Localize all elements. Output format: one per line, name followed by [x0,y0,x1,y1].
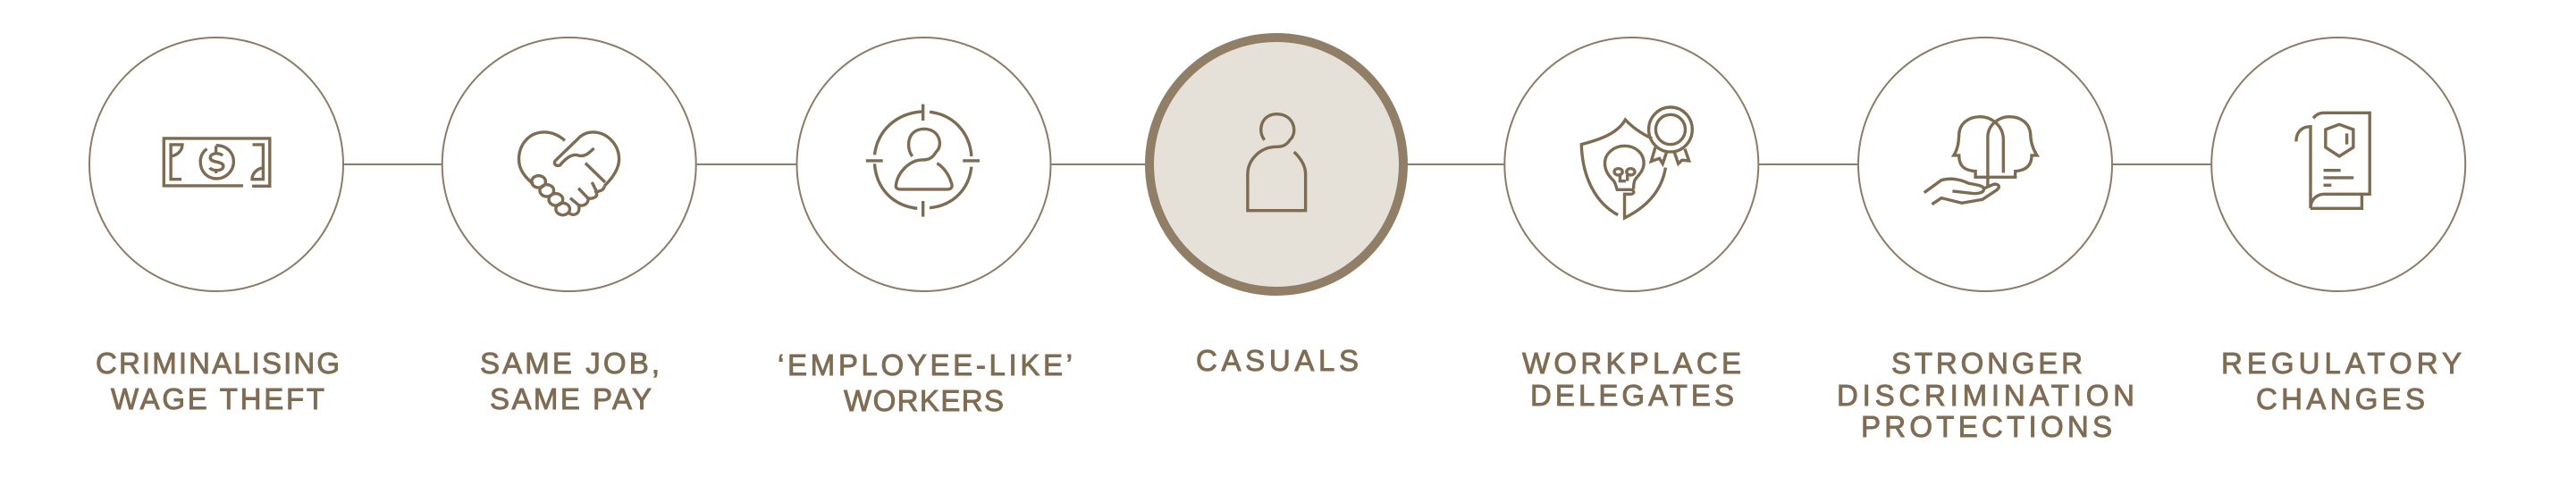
step: same job, same pay [442,38,696,415]
step: workplace delegates [1504,38,1758,412]
label: regulatory changes: REGULATORY [2221,347,2462,380]
icon: person in target [866,105,980,217]
circle: stronger discrimination protections [1858,38,2112,291]
label: workplace delegates: WORKPLACE [1522,347,1741,380]
circle: criminalising wage theft [89,38,343,291]
step: regulatory changes [2211,38,2465,415]
label: employee-like workers: WORKERS [844,384,1004,417]
label: same job, same pay: SAME JOB, [480,347,660,380]
step: stronger discrimination protections [1837,38,2134,443]
label: regulatory changes [2221,347,2462,415]
step: employee-like workers [778,38,1073,417]
icon: two heads on a hand [1924,117,2037,205]
circle: casuals highlighted [1149,38,1403,291]
icon: document with shield [2296,113,2370,208]
icon: shield with bulb and medal [1581,107,1692,218]
icon: casual person [1248,114,1306,211]
label: stronger discrimination protections: STRONGER [1891,347,2083,380]
connector line between the steps [343,163,2211,165]
circle: workplace delegates [1504,38,1758,291]
label: employee-like workers: ‘EMPLOYEE-LIKE’ [778,348,1073,381]
circle: same job, same pay [442,38,696,291]
label: employee-like workers [778,348,1073,417]
label: same job, same pay [480,347,660,415]
label: regulatory changes: CHANGES [2256,382,2425,415]
label: stronger discrimination protections [1837,347,2134,443]
icon: banknote [164,138,270,186]
icon: heart handshake [519,132,619,215]
label: workplace delegates [1522,347,1741,412]
label: casuals: CASUALS [1196,344,1359,377]
label: same job, same pay: SAME PAY [490,382,652,415]
circle: employee-like workers [797,38,1051,291]
label: criminalising wage theft: WAGE THEFT [111,382,324,415]
step: casuals (highlighted) [1149,38,1403,377]
label: criminalising wage theft [96,347,340,415]
label: stronger discrimination protections: PROTECTIONS [1861,410,2112,443]
label: workplace delegates: DELEGATES [1530,379,1734,412]
label: stronger discrimination protections: DISCRIMINATION [1837,379,2134,412]
circle: regulatory changes [2211,38,2465,291]
label: criminalising wage theft: CRIMINALISING [96,347,340,380]
step: criminalising wage theft [89,38,343,415]
